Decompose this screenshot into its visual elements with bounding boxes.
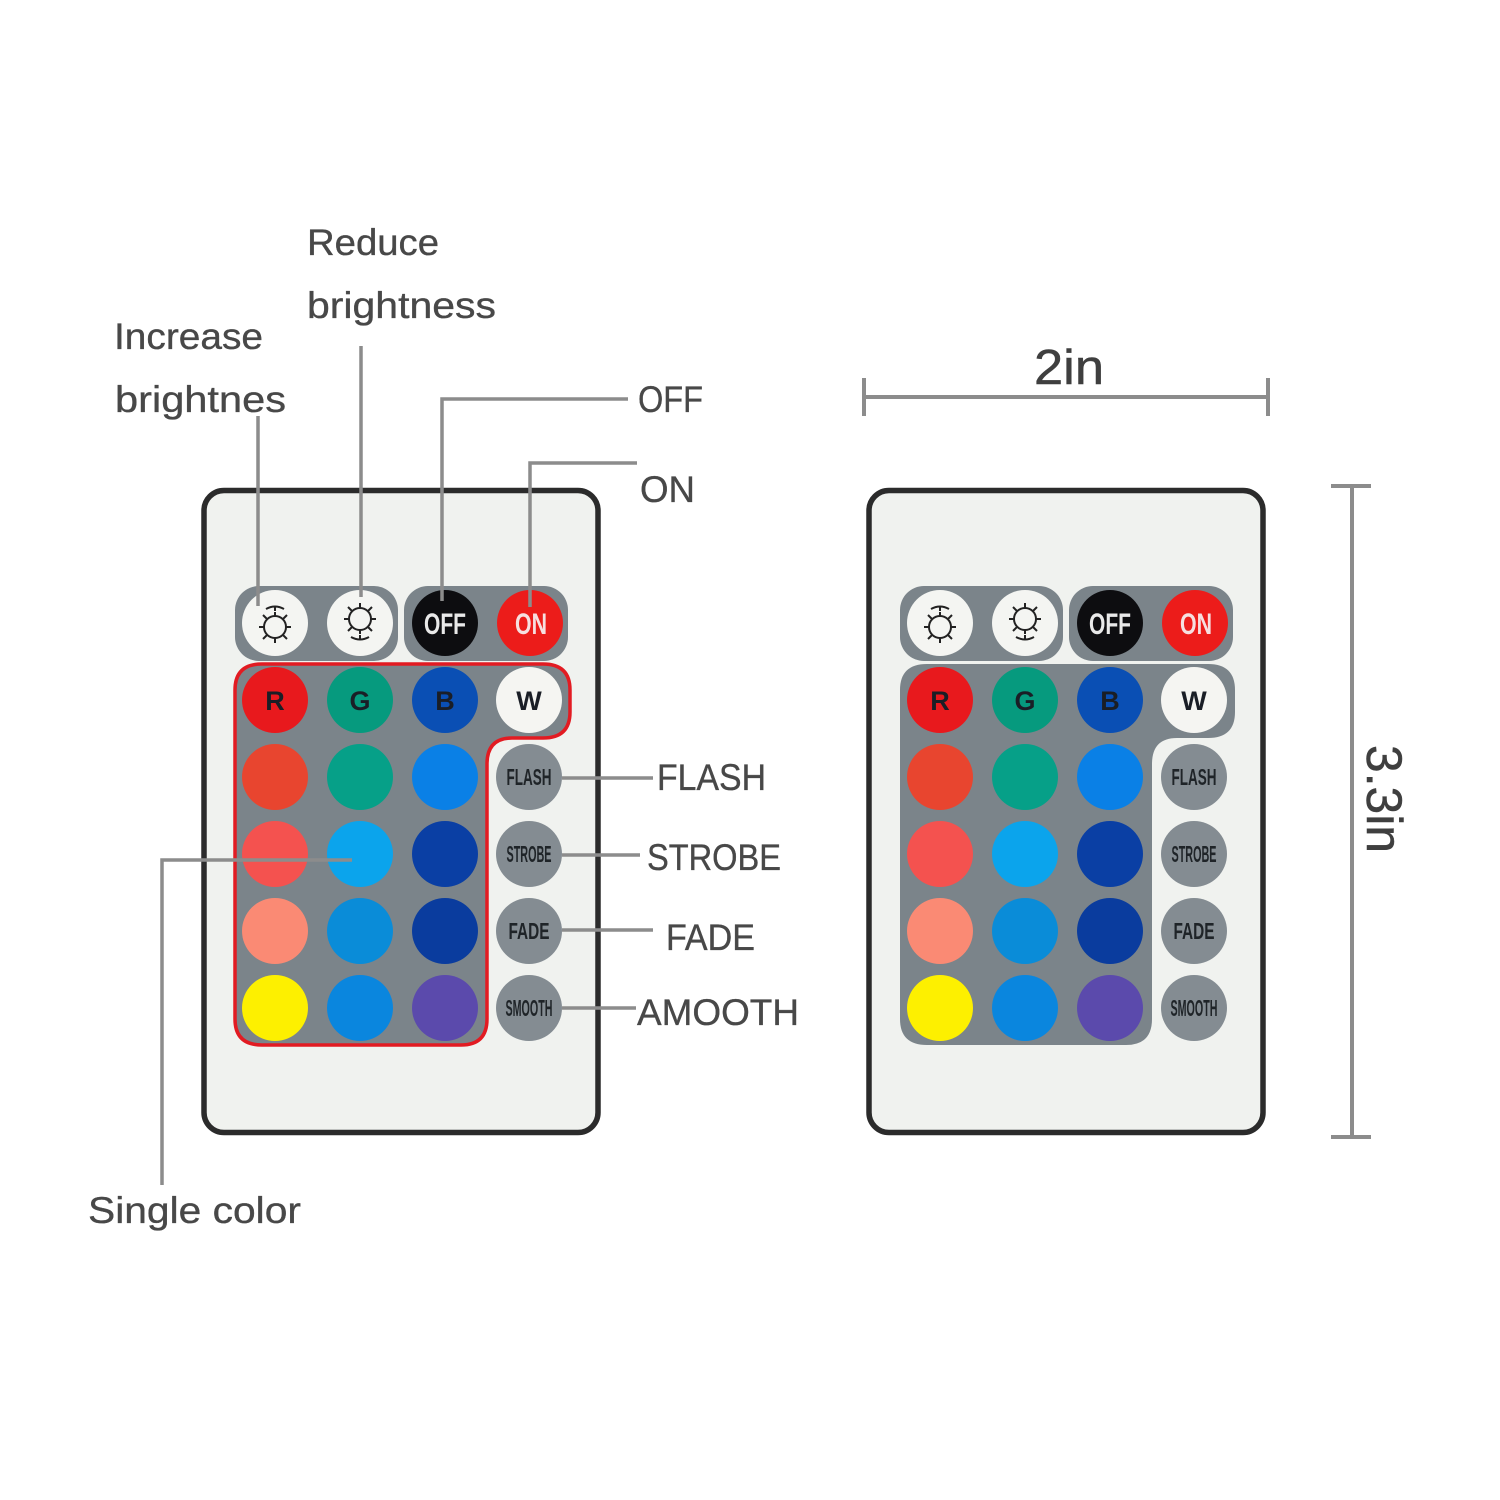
callout: fade: FADE	[666, 917, 755, 958]
button: G	[992, 667, 1058, 733]
callout: flash: FLASH	[657, 757, 766, 798]
button: W	[496, 667, 562, 733]
button: fade	[1161, 898, 1227, 964]
remote control: annotated left	[204, 490, 598, 1132]
button: flash: FLASH	[1172, 764, 1216, 790]
button: R: R	[265, 686, 285, 716]
button: strobe	[496, 821, 562, 887]
button: off: OFF	[424, 608, 466, 641]
callout: off: OFF	[638, 379, 703, 420]
button: B: B	[435, 686, 455, 716]
button: smooth: SMOOTH	[1170, 995, 1218, 1021]
button: on	[497, 590, 563, 656]
callout: strobe: STROBE	[647, 837, 781, 878]
button: G: G	[1014, 686, 1036, 716]
button: R: R	[930, 686, 950, 716]
button: W: W	[516, 686, 542, 716]
remote body	[204, 490, 598, 1132]
button: on: ON	[515, 608, 547, 641]
color button panel	[900, 664, 1235, 1045]
button: flash	[1161, 744, 1227, 810]
button: B	[412, 667, 478, 733]
button: G	[327, 667, 393, 733]
remote control: dimensioned right	[869, 490, 1263, 1132]
button: off: OFF	[1089, 608, 1131, 641]
button: W: W	[1181, 686, 1207, 716]
button: increase brightness	[242, 590, 308, 656]
button: on: ON	[1180, 608, 1212, 641]
button: B: B	[1100, 686, 1120, 716]
button: W	[1161, 667, 1227, 733]
button: flash	[496, 744, 562, 810]
button: R	[907, 667, 973, 733]
button: strobe: STROBE	[1172, 841, 1216, 867]
callout: reduce brightness	[307, 222, 496, 597]
button: G: G	[349, 686, 371, 716]
callout: increase brightness: brightnes	[115, 379, 286, 420]
brightness button panel	[900, 586, 1063, 661]
color swatch buttons	[242, 744, 478, 1041]
button: smooth	[496, 975, 562, 1041]
button: off	[412, 590, 478, 656]
callout: increase brightness: Increase	[114, 316, 263, 357]
dimension: height 3.3in	[1331, 486, 1412, 1137]
power button panel	[404, 586, 568, 661]
callout: on	[530, 463, 695, 607]
button: fade	[496, 898, 562, 964]
color swatch buttons	[907, 744, 1143, 1041]
button: on	[1162, 590, 1228, 656]
button: smooth	[1161, 975, 1227, 1041]
callout: single color	[88, 860, 352, 1231]
callout: single color: Single color	[88, 1190, 301, 1231]
callout: reduce brightness: brightness	[307, 285, 496, 326]
dimension: width 2in	[864, 341, 1268, 416]
callout: increase brightness	[114, 316, 286, 606]
button: off	[1077, 590, 1143, 656]
button: fade: FADE	[1174, 918, 1214, 944]
power button panel	[1069, 586, 1233, 661]
button: strobe: STROBE	[506, 841, 552, 867]
dimension: height 3.3in: 3.3in	[1356, 745, 1412, 853]
callout: off	[442, 379, 703, 601]
button: flash: FLASH	[506, 764, 552, 790]
callout: smooth: AMOOTH	[637, 992, 799, 1033]
button: increase brightness	[907, 590, 973, 656]
button: smooth: SMOOTH	[506, 995, 552, 1021]
callout: reduce brightness: Reduce	[307, 222, 439, 263]
brightness button panel	[235, 586, 398, 661]
callout: on: ON	[640, 469, 695, 510]
button: reduce brightness	[327, 590, 393, 656]
button: R	[242, 667, 308, 733]
button: strobe	[1161, 821, 1227, 887]
color button panel with red outline	[235, 664, 570, 1045]
button: B	[1077, 667, 1143, 733]
button: fade: FADE	[508, 918, 550, 944]
button: reduce brightness	[992, 590, 1058, 656]
remote body	[869, 490, 1263, 1132]
dimension: width 2in: 2in	[1034, 341, 1104, 395]
